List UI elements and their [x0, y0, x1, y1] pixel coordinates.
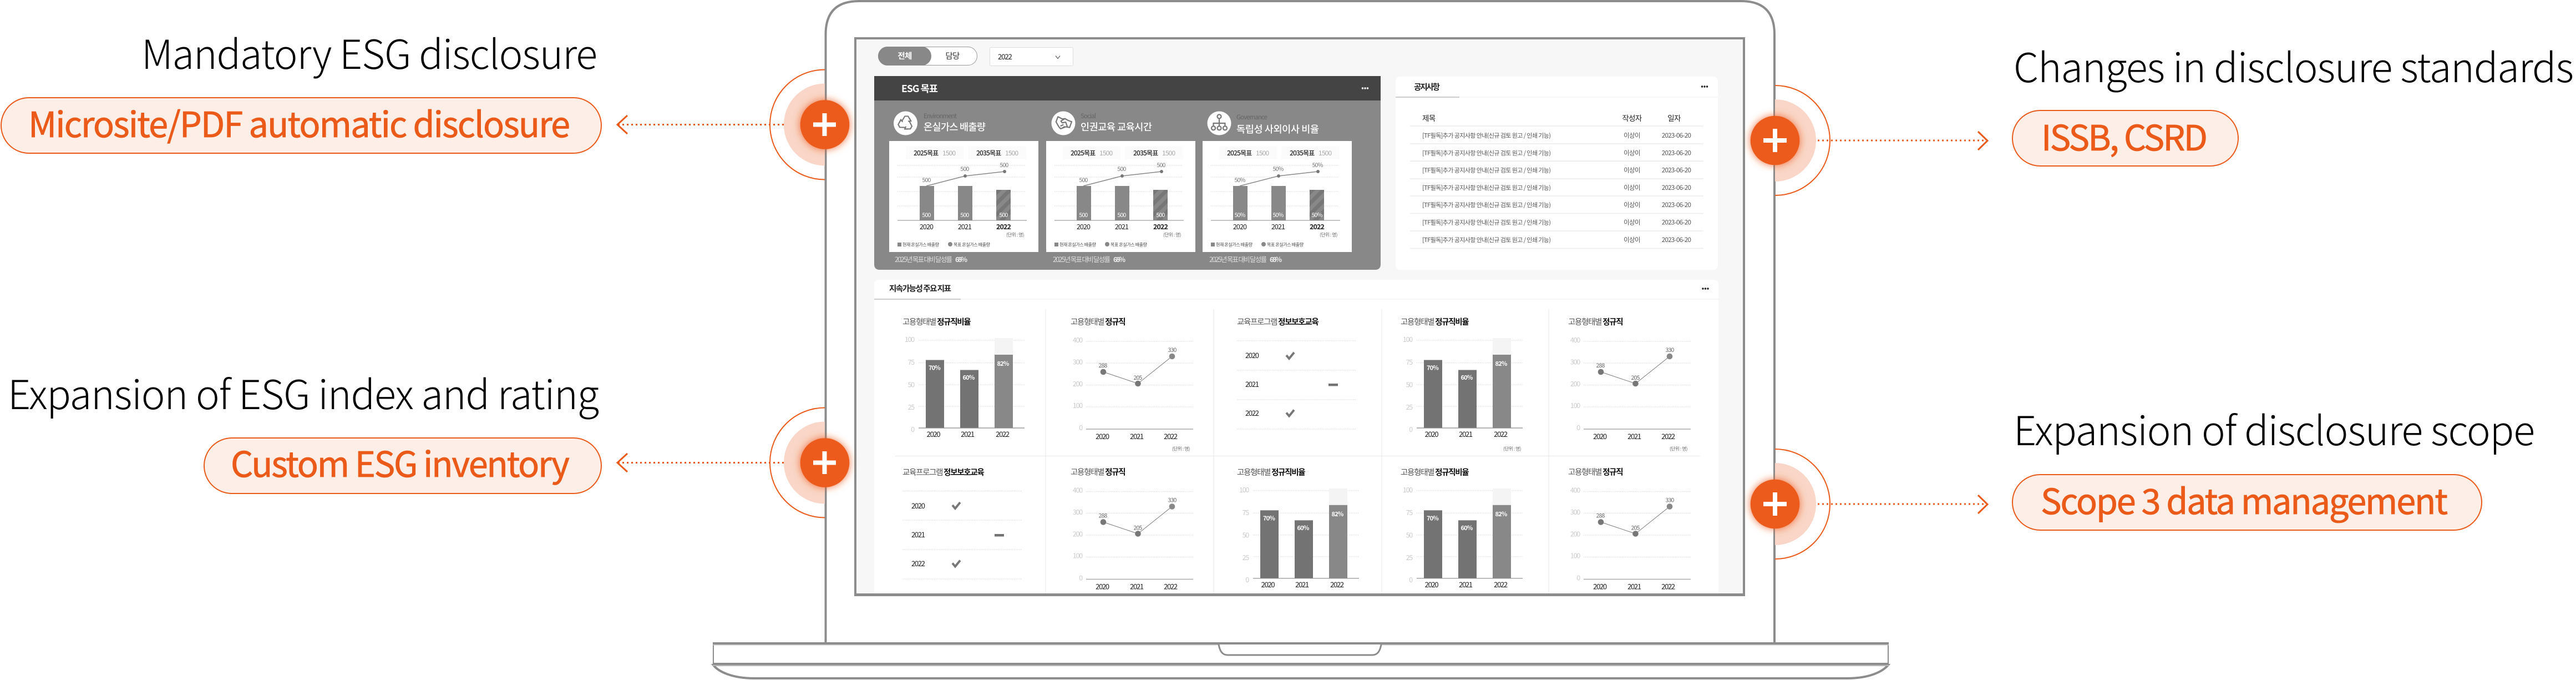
notices table: 작성자 [1622, 112, 1642, 123]
line chart: row 2 col 5: 0 [1576, 572, 1580, 583]
notices table: [TF필독]추가 공지사항 안내(신규 검토 원고 / 인쇄 기능) [1422, 218, 1551, 226]
bar chart: row 1 col 1: 0 [911, 424, 915, 434]
line chart: row 1 col 2: 205 [1134, 374, 1142, 382]
card: education hours chart: 현재 온실가스 배출량 [1059, 242, 1097, 248]
bar chart: row 1 col 1: 고용형태별 정규직비율 [902, 316, 971, 328]
card: greenhouse gas chart: 500 [922, 211, 931, 219]
column: environment: 68% [955, 254, 967, 264]
laptop base [713, 642, 1889, 678]
line chart: row 2 col 2: 288 [1099, 512, 1107, 520]
bar chart: row 1 col 1: 75 [908, 356, 915, 367]
checklist: row 2 col 1 [902, 466, 1022, 579]
checklist: row 1 col 3: 2021 [1245, 379, 1259, 389]
bar chart: row 2 col 3 [1237, 466, 1359, 590]
column: environment [889, 111, 1038, 264]
bar chart: row 1 col 4: 100 [1403, 334, 1413, 344]
line chart: row 2 col 2: 2020 [1096, 581, 1109, 592]
line chart: row 2 col 5: 205 [1631, 524, 1640, 532]
line chart: row 2 col 2: 200 [1073, 528, 1083, 538]
card: education hours chart: 500 [1079, 211, 1088, 219]
bar chart: row 2 col 4: 60% [1461, 523, 1473, 532]
pill: Scope 3 data management [2041, 474, 2448, 525]
card: greenhouse gas chart: 500 [1000, 161, 1009, 169]
bar chart: row 2 col 4: 70% [1427, 513, 1439, 522]
card: greenhouse gas chart: 목표 온실가스 배출량 [954, 242, 991, 248]
card: independent directors chart: 2035목표 [1290, 148, 1315, 158]
line chart: row 1 col 2: 2022 [1164, 431, 1178, 441]
card: independent directors chart: 1500 [1319, 148, 1332, 158]
card: education hours chart: 2035목표 [1133, 148, 1158, 158]
checklist: row 2 col 1: 2020 [911, 500, 925, 511]
bar chart: row 2 col 3: 고용형태별 정규직비율 [1237, 466, 1305, 478]
card: independent directors chart: 2021 [1271, 221, 1285, 231]
laptop lid [825, 1, 1774, 642]
bar chart: row 2 col 4: 고용형태별 정규직비율 [1401, 466, 1469, 478]
bar chart: row 2 col 4: 50 [1406, 529, 1413, 540]
notices table: 이상이 [1624, 148, 1640, 157]
line chart: row 2 col 5: 100 [1570, 550, 1580, 561]
notices table: 2023-06-20 [1662, 183, 1691, 192]
bar chart: row 1 col 4: 60% [1461, 373, 1473, 382]
bar chart: row 2 col 3: 82% [1332, 510, 1344, 518]
notices table: [TF필독]추가 공지사항 안내(신규 검토 원고 / 인쇄 기능) [1422, 166, 1551, 175]
pill: Microsite/PDF automatic disclosure [28, 97, 570, 148]
card: independent directors chart: 50% [1234, 176, 1246, 184]
bar chart: row 2 col 3: 100 [1239, 484, 1249, 495]
hotspot plus [770, 70, 849, 180]
icon: hierarchy [1207, 111, 1231, 135]
card: education hours chart: 2022 [1153, 221, 1168, 231]
label: environment: Environment [924, 112, 957, 120]
notices table: 일자 [1667, 112, 1681, 123]
hotspot plus [1751, 449, 1830, 559]
bar chart: row 2 col 4: 100 [1403, 484, 1413, 495]
line chart: row 1 col 2: 2021 [1130, 431, 1144, 441]
notices table: 이상이 [1624, 200, 1640, 209]
card: greenhouse gas chart: 2022 [996, 221, 1011, 231]
bar chart: row 2 col 4 [1401, 466, 1523, 590]
line chart: row 1 col 2 [1071, 316, 1193, 452]
line chart: row 2 col 2: 고용형태별 정규직 [1071, 466, 1125, 477]
line chart: row 1 col 2: 2020 [1096, 431, 1109, 441]
bar chart: row 1 col 1: 2021 [961, 429, 975, 439]
card: independent directors chart: 50% [1312, 161, 1324, 169]
checklist: row 2 col 1: 2021 [911, 529, 925, 540]
line chart: row 2 col 5: 2021 [1627, 581, 1641, 592]
line chart: row 1 col 5: (단위 : 명) [1670, 445, 1688, 452]
bar chart: row 1 col 1: 60% [963, 373, 975, 382]
panel: ESG goals: ESG 목표 [901, 82, 938, 95]
bar chart: row 2 col 4: 82% [1495, 510, 1508, 518]
card: independent directors chart [1203, 141, 1352, 252]
bar chart: row 2 col 4: 2021 [1459, 579, 1473, 590]
card: greenhouse gas chart: 1500 [942, 148, 956, 158]
bar chart: row 1 col 1: 2020 [927, 429, 940, 439]
card: education hours chart: 1500 [1162, 148, 1175, 158]
bar chart: row 2 col 3: 2022 [1330, 579, 1344, 590]
bar chart: row 2 col 3: 0 [1245, 574, 1249, 585]
bar chart: row 2 col 3: 75 [1243, 507, 1249, 517]
card: education hours chart: (단위 : 명) [1163, 231, 1181, 238]
notices table [1410, 112, 1703, 249]
line chart: row 2 col 5: 고용형태별 정규직 [1568, 466, 1622, 477]
card: independent directors chart: 2020 [1233, 221, 1247, 231]
checklist: row 2 col 1: 2022 [911, 558, 925, 568]
card: greenhouse gas chart: 500 [960, 211, 970, 219]
line chart: row 1 col 2: 300 [1073, 356, 1083, 366]
line chart: row 2 col 5: 200 [1570, 528, 1580, 538]
achievement rate: 2025년 목표 대비 달성률 [1209, 254, 1267, 264]
panel: key sustainability indicators [874, 280, 1718, 593]
notices table: 이상이 [1624, 183, 1640, 192]
bar chart: row 1 col 4: 2021 [1459, 429, 1473, 439]
laptop screen [854, 38, 1745, 596]
line chart: row 2 col 5: 2020 [1593, 581, 1607, 592]
card: education hours chart: 2021 [1115, 221, 1129, 231]
bar chart: row 1 col 4: 82% [1495, 359, 1508, 368]
card: independent directors chart: 목표 온실가스 배출량 [1267, 242, 1304, 248]
line chart: row 1 col 2: 200 [1073, 378, 1083, 389]
card: education hours chart: 1500 [1099, 148, 1113, 158]
line chart: row 1 col 5: 2021 [1627, 431, 1641, 441]
line chart: row 2 col 2: 2022 [1164, 581, 1178, 592]
notices table: 이상이 [1624, 131, 1640, 140]
bar chart: row 1 col 1 [902, 316, 1025, 439]
card: greenhouse gas chart: 500 [999, 211, 1008, 219]
card: greenhouse gas chart: 현재 온실가스 배출량 [902, 242, 940, 248]
line chart: row 1 col 5: 2020 [1593, 431, 1607, 441]
line chart: row 2 col 5: 300 [1570, 506, 1580, 517]
line chart: row 2 col 2: 300 [1073, 506, 1083, 517]
bar chart: row 1 col 4: 25 [1406, 401, 1413, 412]
panel: notices [1396, 77, 1718, 270]
line chart: row 2 col 2: 0 [1079, 572, 1083, 583]
heading: Changes in disclosure standards [2014, 36, 2574, 94]
achievement rate: 2025년 목표 대비 달성률 [1053, 254, 1110, 264]
year select: 2022 [998, 51, 1012, 62]
line chart: row 2 col 2: 2021 [1130, 581, 1144, 592]
bar chart: row 1 col 4: 2022 [1494, 429, 1508, 439]
card: education hours chart: 500 [1079, 176, 1088, 184]
bar chart: row 1 col 4: 70% [1427, 363, 1439, 372]
bar chart: row 1 col 4: 2020 [1425, 429, 1438, 439]
hotspot plus [770, 407, 849, 517]
bar chart: row 1 col 1: 2022 [996, 429, 1010, 439]
heading: greenhouse gas: 온실가스 배출량 [924, 120, 986, 134]
notices table: 2023-06-20 [1662, 235, 1691, 244]
card: independent directors chart: 2025목표 [1227, 148, 1252, 158]
heading: human rights education: 인권교육 교육시간 [1081, 120, 1152, 134]
notices table: 제목 [1422, 112, 1436, 123]
card: greenhouse gas chart: 500 [960, 165, 970, 173]
bar chart: row 1 col 1: 100 [905, 334, 915, 344]
arrow [1800, 132, 1987, 150]
line chart: row 1 col 5: 205 [1631, 374, 1640, 382]
notices table: 이상이 [1624, 218, 1640, 226]
card: education hours chart: 500 [1117, 165, 1127, 173]
laptop [713, 1, 1889, 678]
bar chart: row 2 col 3: 50 [1243, 529, 1249, 540]
heading: Expansion of disclosure scope [2014, 399, 2535, 457]
bar chart: row 1 col 4: (단위 : 명) [1503, 445, 1522, 452]
line chart: row 1 col 2: (단위 : 명) [1172, 445, 1190, 452]
pill: Custom ESG inventory [231, 437, 570, 487]
card: greenhouse gas chart [889, 141, 1038, 252]
line chart: row 1 col 5: 330 [1666, 346, 1674, 354]
notices table: 이상이 [1624, 235, 1640, 244]
line chart: row 1 col 5 [1568, 316, 1691, 452]
arrow [617, 454, 800, 472]
card: education hours chart: 500 [1156, 211, 1165, 219]
card: independent directors chart: 현재 온실가스 배출량 [1216, 242, 1253, 248]
notices table: [TF필독]추가 공지사항 안내(신규 검토 원고 / 인쇄 기능) [1422, 200, 1551, 209]
bar chart: row 2 col 4: 25 [1406, 552, 1413, 562]
notices table: 2023-06-20 [1662, 131, 1691, 140]
line chart: row 1 col 5: 400 [1570, 334, 1580, 345]
heading: Mandatory ESG disclosure [141, 22, 597, 80]
icon: handshake [1052, 111, 1075, 135]
card: independent directors chart: 1500 [1256, 148, 1269, 158]
card: greenhouse gas chart: (단위 : 명) [1006, 231, 1025, 238]
notices table: 이상이 [1624, 166, 1640, 175]
bar chart: row 1 col 4: 0 [1409, 424, 1413, 434]
bar chart: row 2 col 4: 75 [1406, 507, 1413, 517]
notices table: [TF필독]추가 공지사항 안내(신규 검토 원고 / 인쇄 기능) [1422, 183, 1551, 192]
column: governance [1203, 111, 1352, 264]
notices table: [TF필독]추가 공지사항 안내(신규 검토 원고 / 인쇄 기능) [1422, 148, 1551, 157]
callout: expansion of ESG index and rating [8, 362, 849, 517]
filter toggle [878, 47, 977, 66]
card: education hours chart [1046, 141, 1195, 252]
bar chart: row 2 col 4: 0 [1409, 574, 1413, 585]
label: governance: Governance [1236, 113, 1267, 122]
line chart: row 1 col 2: 288 [1099, 361, 1107, 370]
filter toggle: 전체 [897, 50, 912, 62]
line chart: row 1 col 2: 330 [1168, 346, 1177, 354]
callout: expansion of disclosure scope [1751, 399, 2535, 559]
line chart: row 1 col 2: 고용형태별 정규직 [1071, 316, 1125, 328]
callout: mandatory ESG disclosure [1, 22, 849, 180]
line chart: row 2 col 2: 100 [1073, 550, 1083, 561]
line chart: row 1 col 5: 2022 [1661, 431, 1675, 441]
card: education hours chart: 2020 [1077, 221, 1091, 231]
card: greenhouse gas chart: 2035목표 [976, 148, 1001, 158]
bar chart: row 1 col 1: 70% [929, 363, 941, 372]
bar chart: row 1 col 1: 82% [997, 359, 1010, 368]
card: greenhouse gas chart: 2025목표 [914, 148, 939, 158]
card: education hours chart: 500 [1157, 161, 1166, 169]
line chart: row 2 col 5: 400 [1570, 484, 1580, 495]
line chart: row 1 col 5: 0 [1576, 422, 1580, 432]
card: independent directors chart: 50% [1272, 165, 1284, 173]
bar chart: row 2 col 4: 2020 [1425, 579, 1438, 590]
year select [990, 48, 1073, 66]
line chart: row 1 col 5: 200 [1570, 378, 1580, 389]
card: greenhouse gas chart: 500 [922, 176, 931, 184]
panel: ESG goals [874, 76, 1381, 270]
pill: ISSB, CSRD [2041, 110, 2208, 161]
notices table: 2023-06-20 [1662, 166, 1691, 175]
card: independent directors chart: 50% [1272, 211, 1284, 219]
card: independent directors chart: (단위 : 명) [1320, 231, 1338, 238]
bar chart: row 1 col 1: 50 [908, 379, 915, 390]
line chart: row 1 col 5: 300 [1570, 356, 1580, 366]
checklist: row 1 col 3: 2020 [1245, 350, 1259, 360]
label: social: Social [1081, 112, 1096, 120]
notices table: 2023-06-20 [1662, 200, 1691, 209]
card: education hours chart: 2025목표 [1071, 148, 1096, 158]
line chart: row 1 col 2: 0 [1079, 422, 1083, 432]
heading: independent directors: 독립성 사외이사 비율 [1236, 122, 1319, 136]
bar chart: row 1 col 1: 25 [908, 401, 915, 412]
card: independent directors chart: 50% [1234, 211, 1246, 219]
card: independent directors chart: 2022 [1310, 221, 1324, 231]
bar chart: row 2 col 3: 60% [1297, 523, 1310, 532]
heading: Expansion of ESG index and rating [8, 362, 599, 421]
pill [2012, 110, 2238, 166]
hotspot plus [1751, 85, 1830, 195]
line chart: row 2 col 2: 205 [1134, 524, 1142, 532]
line chart: row 1 col 2: 100 [1073, 400, 1083, 410]
line chart: row 2 col 5 [1568, 466, 1691, 592]
bar chart: row 2 col 3: 2020 [1261, 579, 1275, 590]
notices table: 2023-06-20 [1662, 218, 1691, 226]
notices table: 2023-06-20 [1662, 148, 1691, 157]
card: education hours chart: 500 [1117, 211, 1127, 219]
notices table: [TF필독]추가 공지사항 안내(신규 검토 원고 / 인쇄 기능) [1422, 131, 1551, 140]
bar chart: row 2 col 3: 2021 [1295, 579, 1309, 590]
arrow [1800, 495, 1987, 513]
line chart: row 1 col 5: 고용형태별 정규직 [1568, 316, 1622, 328]
column: social: 68% [1113, 254, 1125, 264]
checklist: row 1 col 3 [1237, 316, 1357, 429]
checklist: row 1 col 3: 2022 [1245, 407, 1259, 418]
icon: recycle [894, 111, 917, 135]
card: greenhouse gas chart: 2021 [958, 221, 972, 231]
notices table: [TF필독]추가 공지사항 안내(신규 검토 원고 / 인쇄 기능) [1422, 235, 1551, 244]
achievement rate: 2025년 목표 대비 달성률 [895, 254, 952, 264]
arrow [617, 115, 800, 134]
card: education hours chart: 목표 온실가스 배출량 [1110, 242, 1148, 248]
panel: key sustainability indicators: 지속가능성 주요 지표 [889, 283, 951, 294]
column: social [1046, 111, 1195, 264]
line chart: row 1 col 2: 400 [1073, 334, 1083, 345]
line chart: row 1 col 5: 288 [1596, 361, 1605, 370]
card: greenhouse gas chart: 2020 [920, 221, 934, 231]
bar chart: row 1 col 4 [1401, 316, 1523, 452]
line chart: row 2 col 2 [1071, 466, 1193, 592]
line chart: row 2 col 5: 330 [1666, 496, 1674, 504]
filter toggle: 담당 [945, 50, 960, 62]
bar chart: row 1 col 4: 75 [1406, 356, 1413, 367]
column: governance: 68% [1270, 254, 1282, 264]
line chart: row 2 col 5: 288 [1596, 512, 1605, 520]
panel: notices: 공지사항 [1414, 81, 1440, 93]
checklist: row 1 col 3: 교육프로그램 정보보호교육 [1237, 316, 1319, 328]
line chart: row 2 col 5: 2022 [1661, 581, 1675, 592]
bar chart: row 2 col 4: 2022 [1494, 579, 1508, 590]
bar chart: row 2 col 3: 70% [1263, 513, 1275, 522]
callout: changes in disclosure standards [1751, 36, 2574, 195]
line chart: row 1 col 5: 100 [1570, 400, 1580, 410]
bar chart: row 1 col 4: 50 [1406, 379, 1413, 390]
bar chart: row 1 col 4: 고용형태별 정규직비율 [1401, 316, 1469, 328]
checklist: row 2 col 1: 교육프로그램 정보보호교육 [902, 466, 984, 478]
card: independent directors chart: 50% [1311, 211, 1323, 219]
bar chart: row 2 col 3: 25 [1243, 552, 1249, 562]
line chart: row 2 col 2: 400 [1073, 484, 1083, 495]
line chart: row 2 col 2: 330 [1168, 496, 1177, 504]
card: greenhouse gas chart: 1500 [1005, 148, 1018, 158]
